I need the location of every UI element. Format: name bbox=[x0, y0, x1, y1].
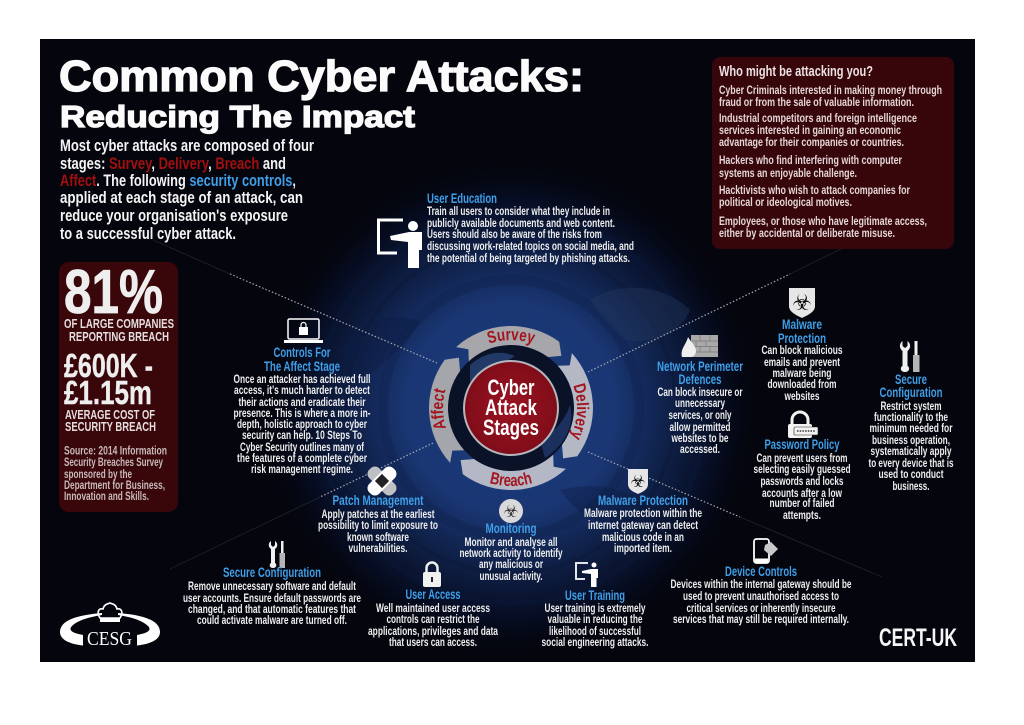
stage arrow: delivery bbox=[558, 353, 593, 458]
body text: malware being bbox=[772, 368, 832, 380]
heading: Secure bbox=[895, 372, 927, 387]
body text: services that may still be required internally. bbox=[673, 614, 849, 626]
body text: selecting easily guessed bbox=[754, 464, 850, 476]
attacker list: advantage for their companies or countries. bbox=[719, 135, 904, 149]
body text: depth, holistic approach to cyber bbox=[237, 419, 367, 431]
heading: The Affect Stage bbox=[264, 359, 340, 374]
central blue glow bbox=[261, 158, 761, 658]
centre disc bbox=[464, 361, 558, 455]
source note: sponsored by the bbox=[64, 469, 132, 481]
icon: padlock bbox=[423, 562, 441, 587]
panel: statistics bbox=[59, 258, 178, 512]
body text: security can help. 10 Steps To bbox=[242, 430, 362, 442]
control: patch management bbox=[318, 464, 438, 555]
heading: Patch Management bbox=[332, 493, 424, 508]
body text: Can block insecure or bbox=[658, 387, 743, 399]
icon: biohazard shield: ☣ bbox=[630, 472, 646, 492]
icon: monitoring target: ☣ bbox=[503, 502, 519, 522]
body text: known software bbox=[347, 532, 409, 544]
intro text: reduce your organisation's exposure bbox=[60, 206, 288, 225]
intro text: applied at each stage of an attack, can bbox=[60, 188, 303, 207]
label: affect: Affect bbox=[430, 388, 446, 428]
body text: Monitor and analyse all bbox=[464, 537, 558, 549]
attacker list: Cyber Criminals interested in making money through bbox=[719, 83, 942, 97]
body text: could activate malware are turned off. bbox=[197, 615, 347, 627]
cycle diagram: cyber attack stages bbox=[429, 326, 593, 490]
panel heading: Who might be attacking you? bbox=[719, 63, 873, 80]
body text: emails and prevent bbox=[764, 357, 840, 369]
heading: Controls For bbox=[274, 345, 331, 360]
label: survey: Survey bbox=[487, 330, 536, 346]
body text bbox=[460, 537, 563, 583]
attacker list: Hacktivists who wish to attack companies for bbox=[719, 183, 910, 197]
icon: tools bbox=[269, 541, 285, 568]
body text bbox=[584, 508, 702, 555]
body text: minimum needed for bbox=[870, 423, 953, 435]
control: malware protection gateway bbox=[584, 469, 702, 555]
label: delivery: Delivery bbox=[569, 383, 590, 440]
heading: User Education bbox=[427, 191, 497, 206]
control: network perimeter defences bbox=[657, 335, 744, 456]
body text: Can prevent users from bbox=[756, 453, 848, 465]
heading bbox=[778, 317, 826, 346]
icon: biohazard shield: ☣ bbox=[792, 291, 812, 316]
heading bbox=[880, 372, 942, 400]
source note: Source: 2014 Information bbox=[64, 446, 167, 458]
body text: applications, privileges and data bbox=[368, 626, 498, 638]
icon: firewall bbox=[682, 335, 718, 357]
heading: Malware bbox=[782, 317, 822, 332]
body text: services, or only bbox=[668, 410, 732, 422]
title: Reducing The Impact bbox=[60, 99, 415, 134]
label: breach: Breach bbox=[490, 472, 532, 486]
body text: unnecessary bbox=[675, 398, 725, 410]
body text: valuable in reducing the bbox=[548, 614, 642, 626]
control: device controls bbox=[670, 539, 852, 626]
stat: cost range bbox=[64, 347, 153, 411]
heading: User Access bbox=[406, 587, 460, 602]
body text bbox=[658, 387, 743, 456]
body text: any malicious or bbox=[479, 559, 543, 571]
intro text bbox=[60, 136, 314, 243]
body text: used to conduct bbox=[878, 469, 944, 481]
heading: Password Policy bbox=[764, 437, 840, 452]
control: secure configuration lower bbox=[183, 541, 361, 627]
centre label: Stages bbox=[483, 415, 539, 440]
body text: controls can restrict the bbox=[386, 614, 480, 626]
body text bbox=[427, 206, 634, 265]
icon: lock with password field bbox=[788, 412, 818, 438]
attacker list bbox=[719, 83, 942, 240]
body text bbox=[318, 509, 438, 555]
logo: CESG: CESG bbox=[87, 628, 132, 650]
control: secure configuration right bbox=[868, 341, 954, 493]
stat: cost range: £600K - bbox=[64, 347, 153, 384]
body text: their actions and eradicate their bbox=[238, 397, 366, 409]
body text: possibility to limit exposure to bbox=[318, 520, 438, 532]
body text: critical services or inherently insecure bbox=[686, 603, 836, 615]
body text: attempts. bbox=[783, 510, 821, 522]
attacker list: Industrial competitors and foreign intelligence bbox=[719, 111, 917, 125]
icon: phone and tag bbox=[754, 539, 778, 563]
body text: network activity to identify bbox=[460, 548, 563, 560]
logo: CERT-UK: CERT-UK bbox=[879, 624, 957, 652]
stat caption: cost: SECURITY BREACH bbox=[65, 419, 156, 434]
body text: risk management regime. bbox=[251, 464, 353, 476]
body text: systematically apply bbox=[870, 446, 952, 458]
body text: used to prevent unauthorised access to bbox=[683, 591, 839, 603]
body text: publicly available documents and web content. bbox=[427, 218, 615, 230]
body text: vulnerabilities. bbox=[348, 543, 408, 555]
intro text: Most cyber attacks are composed of four bbox=[60, 136, 314, 155]
source note: Department for Business, bbox=[64, 480, 165, 492]
body text bbox=[542, 603, 648, 649]
attacker list: Employees, or those who have legitimate access, bbox=[719, 214, 927, 228]
body text: downloaded from bbox=[768, 379, 836, 391]
attacker list: services interested in gaining an economic bbox=[719, 123, 901, 137]
body text bbox=[183, 581, 361, 627]
attacker list: political or ideological motives. bbox=[719, 195, 852, 209]
body text bbox=[868, 401, 954, 493]
centre label: Cyber bbox=[488, 375, 535, 400]
intro text: Affect. The following security controls, bbox=[60, 171, 296, 190]
body text: accessed. bbox=[680, 444, 720, 456]
body text: accounts after a low bbox=[762, 488, 842, 500]
intro text: to a successful cyber attack. bbox=[60, 224, 236, 243]
attacker list: Hackers who find interfering with computer bbox=[719, 153, 902, 167]
panel: who might be attacking you bbox=[712, 57, 954, 249]
body text: that users can access. bbox=[389, 637, 477, 649]
heading: Monitoring bbox=[486, 521, 536, 536]
body text: the potential of being targeted by phishing attacks. bbox=[427, 253, 630, 265]
source note bbox=[64, 446, 167, 503]
control: user access bbox=[368, 562, 498, 649]
body text: presence. This is where a more in- bbox=[234, 408, 371, 420]
body text bbox=[670, 579, 852, 626]
body text: access, it's much harder to detect bbox=[234, 385, 370, 397]
body text: to every device that is bbox=[868, 458, 954, 470]
background panel bbox=[40, 39, 975, 662]
attacker list: either by accidental or deliberate misuse. bbox=[719, 226, 895, 240]
dotted spoke lines bbox=[153, 211, 918, 577]
logo: CESG bbox=[60, 603, 160, 650]
control: password policy bbox=[754, 412, 850, 522]
control: malware protection upper bbox=[762, 288, 842, 403]
stage arrow: breach bbox=[461, 455, 566, 490]
icon: bandage bbox=[365, 464, 399, 498]
stat caption: large companies: OF LARGE COMPANIES bbox=[64, 316, 174, 331]
body text: social engineering attacks. bbox=[542, 637, 648, 649]
body text: functionality to the bbox=[874, 412, 948, 424]
attacker list: systems an enjoyable challenge. bbox=[719, 166, 857, 180]
intro text: stages: Survey, Delivery, Breach and bbox=[60, 154, 286, 173]
body text: number of failed bbox=[770, 498, 834, 510]
stat caption: large companies: REPORTING BREACH bbox=[69, 329, 169, 344]
body text: passwords and locks bbox=[760, 476, 844, 488]
stage arrow: affect bbox=[429, 358, 464, 463]
source note: Innovation and Skills. bbox=[64, 491, 149, 503]
heading: Configuration bbox=[880, 385, 942, 400]
stat: cost range: £1.15m bbox=[64, 374, 152, 411]
heading: Secure Configuration bbox=[223, 565, 321, 580]
body text: the features of a complete cyber bbox=[237, 453, 367, 465]
icon: laptop with padlock bbox=[284, 319, 323, 343]
body text: allow permitted bbox=[670, 422, 730, 434]
body text: business operation, bbox=[872, 435, 950, 447]
stage arrow: survey bbox=[456, 326, 561, 361]
heading: Malware Protection bbox=[598, 493, 688, 508]
stat caption: large companies bbox=[64, 316, 174, 344]
control: monitoring bbox=[460, 499, 563, 583]
stat: 81 percent: 81% bbox=[64, 258, 163, 327]
body text: websites bbox=[784, 391, 820, 403]
heading: Defences bbox=[678, 372, 722, 387]
body text: websites to be bbox=[671, 433, 728, 445]
body text: Malware protection within the bbox=[584, 508, 702, 520]
body text: Restrict system bbox=[880, 401, 942, 413]
body text: User training is extremely bbox=[544, 603, 646, 615]
body text: Remove unnecessary software and default bbox=[188, 581, 356, 593]
centre label bbox=[483, 375, 539, 440]
body text bbox=[368, 603, 498, 649]
body text: user accounts. Ensure default passwords are bbox=[183, 593, 361, 605]
attacker list: fraud or from the sale of valuable information. bbox=[719, 95, 914, 109]
body text: Devices within the internal gateway should be bbox=[670, 579, 852, 591]
body text: Once an attacker has achieved full bbox=[234, 374, 370, 386]
body text: business. bbox=[892, 481, 930, 493]
body text: imported item. bbox=[614, 543, 672, 555]
body text: likelihood of successful bbox=[549, 626, 641, 638]
body text: Can block malicious bbox=[762, 345, 842, 357]
source note: Security Breaches Survey bbox=[64, 457, 163, 469]
centre label: Attack bbox=[485, 395, 538, 420]
body text bbox=[762, 345, 842, 403]
icon: tools bbox=[900, 341, 920, 372]
title bbox=[59, 52, 584, 134]
body text: malicious code in an bbox=[602, 532, 684, 544]
body text: Cyber Security outlines many of bbox=[240, 442, 364, 454]
icon: presenter small bbox=[576, 562, 598, 587]
heading: Protection bbox=[778, 331, 826, 346]
body text: Well maintained user access bbox=[376, 603, 490, 615]
body text bbox=[234, 374, 371, 476]
body text: changed, and that automatic features that bbox=[188, 604, 356, 616]
icon: presenter bbox=[378, 220, 422, 268]
heading bbox=[657, 359, 744, 387]
body text bbox=[754, 453, 850, 522]
title: Common Cyber Attacks: bbox=[59, 52, 584, 101]
stat caption: cost bbox=[65, 407, 156, 434]
control: user education bbox=[378, 191, 634, 268]
body text: Users should also be aware of the risks from bbox=[427, 229, 602, 241]
heading: User Training bbox=[565, 588, 625, 603]
stat caption: cost: AVERAGE COST OF bbox=[65, 407, 155, 422]
heading: Device Controls bbox=[725, 564, 797, 579]
body text: internet gateway can detect bbox=[588, 520, 698, 532]
body text: Apply patches at the earliest bbox=[322, 509, 435, 521]
control: user training bbox=[542, 562, 648, 649]
control: affect stage bbox=[234, 319, 371, 476]
heading bbox=[264, 345, 340, 374]
body text: unusual activity. bbox=[480, 571, 542, 583]
body text: discussing work-related topics on social media, and bbox=[427, 241, 634, 253]
heading: Network Perimeter bbox=[657, 359, 744, 374]
body text: Train all users to consider what they include in bbox=[427, 206, 610, 218]
inner dark map ring bbox=[448, 345, 574, 471]
